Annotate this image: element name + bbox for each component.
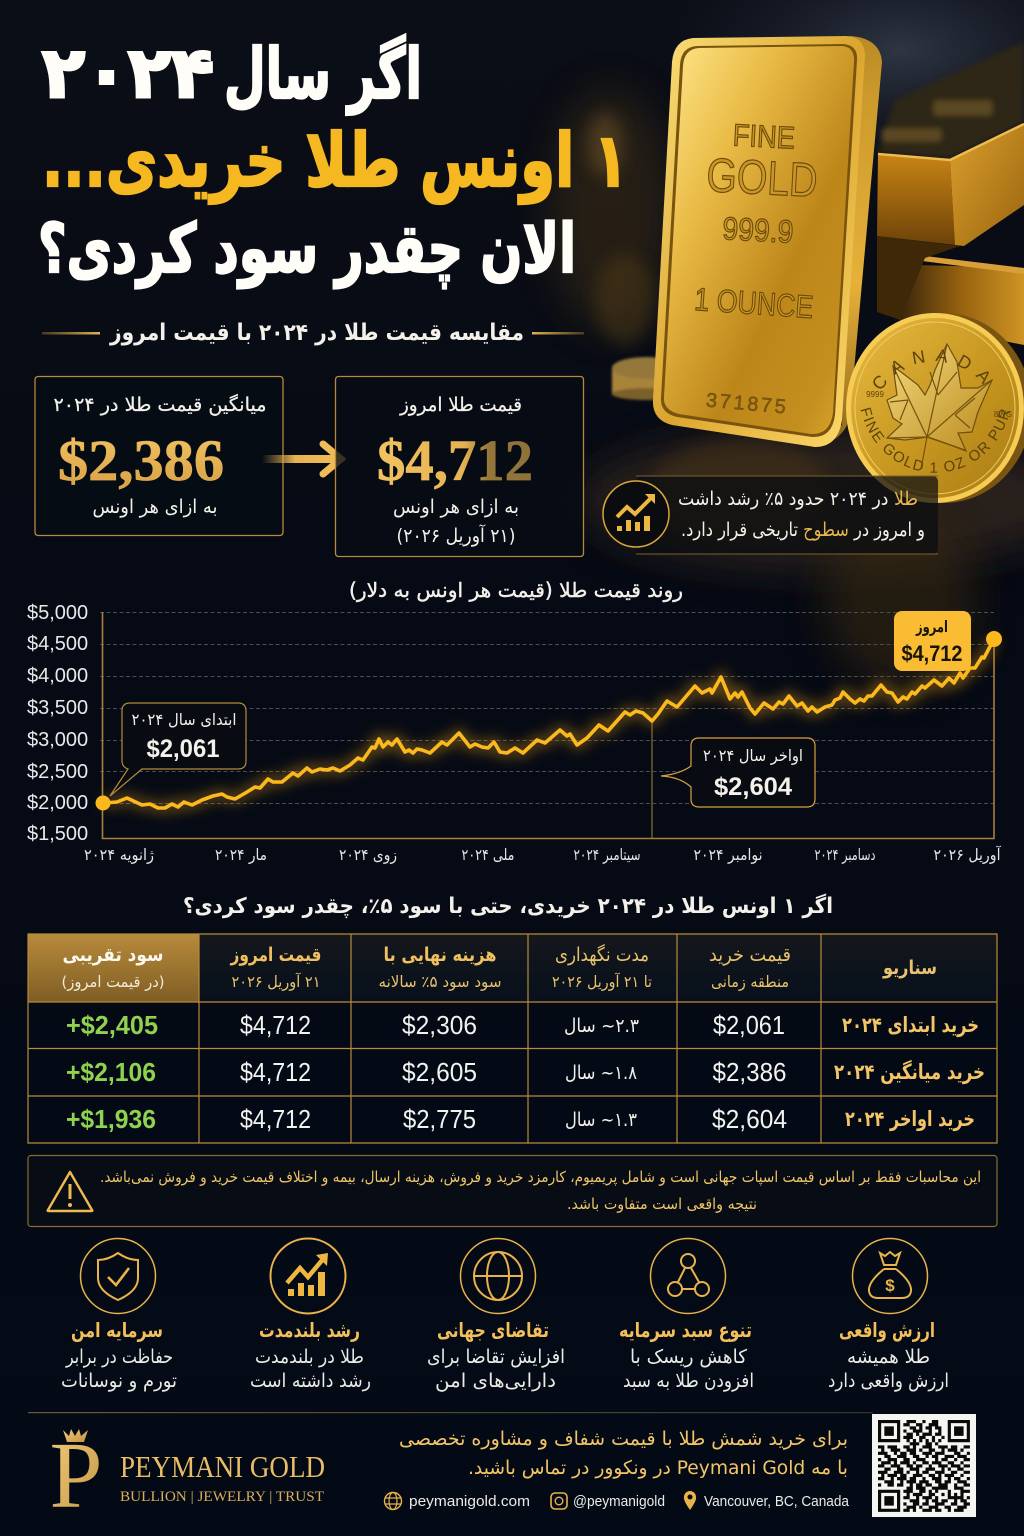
row: average 2024: $2,386	[712, 1057, 786, 1087]
callout: today	[894, 611, 971, 671]
row: late 2024: +$1,936	[66, 1104, 156, 1134]
row: late 2024: خرید اواخر ۲۰۲۴	[845, 1107, 975, 1131]
bar engraving: FINE	[732, 117, 796, 156]
hero photo: gold bars and coin	[542, 0, 1024, 714]
table heading: اگر ۱ اونس طلا در ۲۰۲۴ خریدی، حتی با سود ۵٪، چقدر سود کردی؟	[183, 893, 833, 919]
table grid	[28, 934, 997, 1143]
x axis labels	[84, 845, 1001, 865]
row: average 2024	[66, 1057, 985, 1087]
row: late 2024: $4,712	[240, 1104, 311, 1134]
contact row: @peymanigold	[573, 1493, 665, 1510]
gold maple coin: FINE GOLD 1 OZ OR PUR	[860, 408, 1010, 473]
feature: long-term growth: طلا در بلندمدت	[255, 1346, 364, 1368]
bar engraving: 371875	[705, 390, 787, 418]
main gold bar	[653, 36, 882, 447]
arrow	[262, 444, 341, 474]
x axis labels: ملی ۲۰۲۴	[461, 846, 514, 864]
call to action text: برای خرید شمش طلا با قیمت شفاف و مشاوره تخصصی	[399, 1428, 848, 1450]
feature: real value	[828, 1238, 949, 1392]
panel: disclaimer	[28, 1156, 997, 1226]
logo: Peymani Gold: BULLION | JEWELRY | TRUST	[120, 1489, 324, 1505]
table header row	[28, 934, 997, 1002]
price line glow	[103, 639, 994, 808]
gold maple coin	[846, 313, 1024, 503]
callout: end of 2024: $2,604	[714, 773, 792, 801]
callout: today: $4,712	[902, 641, 962, 666]
feature: global demand: تقاضای جهانی	[437, 1318, 549, 1342]
icon: web	[384, 1492, 402, 1510]
bar engraving: GOLD	[705, 149, 819, 208]
background haze	[550, 0, 1024, 685]
logo: Peymani Gold	[50, 1424, 325, 1528]
row: average 2024: خرید میانگین ۲۰۲۴	[834, 1059, 985, 1084]
header labels: سود تقریبی	[62, 944, 164, 966]
callout: start of 2024	[110, 703, 246, 796]
bar engraving: 999.9	[722, 210, 794, 250]
blurred coins stack	[612, 357, 680, 400]
x axis labels: دسامبر ۲۰۲۴	[814, 846, 876, 864]
panel: average 2024 price: میانگین قیمت طلا در ۲۰۲۴	[53, 393, 266, 416]
panel: today's price: (۲۱ آوریل ۲۰۲۶)	[396, 523, 516, 547]
y axis labels: $4,000	[27, 665, 88, 687]
icon: globe	[460, 1238, 536, 1314]
icon: money bag	[852, 1238, 928, 1314]
contact row	[384, 1491, 850, 1510]
callout: gold growth note: و امروز در سطوح تاریخی قرار دارد.	[681, 519, 925, 541]
feature: diversification: کاهش ریسک با	[630, 1346, 748, 1368]
call to action text	[399, 1428, 848, 1479]
header labels	[62, 943, 937, 992]
QR code	[872, 1414, 976, 1517]
y axis labels: $4,500	[27, 633, 88, 655]
icon: instagram	[551, 1493, 567, 1509]
table: scenarios	[28, 934, 997, 1143]
feature: real value: ارزش واقعی دارد	[828, 1370, 949, 1392]
row: early 2024: $2,061	[713, 1010, 785, 1040]
y axis labels	[27, 602, 88, 845]
icon: shield	[80, 1238, 156, 1314]
row: early 2024: ۲.۳~ سال	[564, 1015, 639, 1037]
feature: diversification	[619, 1238, 754, 1392]
panel: average 2024 price	[35, 376, 283, 536]
row: average 2024: $4,712	[240, 1057, 311, 1087]
icon: growth chart	[603, 481, 669, 547]
feature: diversification: تنوع سبد سرمایه	[619, 1318, 752, 1342]
header labels: سود سود ۵٪ سالانه	[378, 973, 502, 991]
feature: long-term growth: رشد داشته است	[250, 1370, 371, 1392]
x axis labels: ژانویه ۲۰۲۴	[84, 846, 154, 864]
feature: safe investment: تورم و نوسانات	[61, 1370, 177, 1392]
feature: safe investment: حفاظت در برابر	[65, 1346, 173, 1368]
row: average 2024: +$2,106	[66, 1057, 156, 1087]
x axis labels: نوامبر ۲۰۲۴	[694, 846, 762, 864]
row: late 2024: $2,604	[712, 1104, 787, 1134]
row: late 2024: $2,775	[403, 1104, 476, 1134]
gold maple coin: CANADA	[873, 349, 989, 388]
feature: global demand	[427, 1238, 565, 1392]
panel: today's price: $4,712	[377, 428, 533, 493]
callout: gold growth note: طلا در ۲۰۲۴ حدود ۵٪ رشد داشت	[678, 488, 918, 510]
back gold bars	[877, 42, 1024, 345]
header labels: تا ۲۱ آوریل ۲۰۲۶	[552, 972, 652, 992]
icon: crown	[63, 1429, 88, 1442]
callout: start of 2024: ابتدای سال ۲۰۲۴	[132, 710, 236, 729]
y axis labels: $1,500	[27, 823, 88, 845]
logo: Peymani Gold: P	[50, 1424, 102, 1528]
feature: safe investment	[61, 1238, 177, 1392]
row: late 2024: ۱.۳~ سال	[565, 1109, 637, 1131]
feature: real value: ارزش واقعی	[839, 1318, 935, 1342]
feature: long-term growth	[250, 1238, 371, 1392]
panel: average 2024 price: به ازای هر اونس	[92, 496, 218, 518]
bar engraving	[693, 117, 819, 418]
row: late 2024	[66, 1104, 975, 1134]
title: ۲۰۲۴	[42, 32, 214, 114]
callout: start of 2024: $2,061	[146, 735, 220, 763]
header labels: قیمت خرید	[709, 944, 791, 966]
callout: today: امروز	[915, 617, 948, 636]
panel: average 2024 price: $2,386	[58, 428, 224, 493]
y axis labels: $5,000	[27, 602, 88, 624]
price line	[103, 639, 994, 808]
y axis labels: $2,000	[27, 792, 88, 814]
panel: today's price	[336, 376, 584, 556]
start and end dots	[96, 631, 1002, 810]
call to action text: با مه Peymani Gold در ونکوور در تماس باشید.	[468, 1457, 848, 1479]
subtitle: مقایسه قیمت طلا در ۲۰۲۴ با قیمت امروز	[109, 320, 524, 346]
x axis labels: زوی ۲۰۲۴	[339, 846, 397, 865]
row: early 2024: $4,712	[240, 1010, 311, 1040]
title: اگر سال	[224, 33, 422, 115]
panel: today's price: قیمت طلا امروز	[399, 394, 522, 416]
feature: global demand: دارایی‌های امن	[435, 1370, 556, 1392]
contact row: Vancouver, BC, Canada	[704, 1493, 850, 1510]
header labels: (در قیمت امروز)	[62, 973, 164, 992]
bar engraving: 1 OUNCE	[693, 281, 815, 325]
row: average 2024: $2,605	[402, 1057, 477, 1087]
panel: disclaimer: نتیجه واقعی است متفاوت باشد.	[567, 1195, 757, 1213]
chart heading: روند قیمت طلا (قیمت هر اونس به دلار)	[349, 578, 683, 602]
header labels: هزینه نهایی با	[384, 944, 496, 966]
row: early 2024	[66, 1010, 979, 1040]
feature: long-term growth: رشد بلندمدت	[259, 1318, 360, 1342]
y axis labels: $3,000	[27, 729, 88, 751]
line chart: gold price trend	[27, 602, 1002, 865]
row: average 2024: ۱.۸~ سال	[565, 1062, 637, 1084]
panel: today's price: به ازای هر اونس	[393, 496, 519, 518]
header labels: ۲۱ آوریل ۲۰۲۶	[232, 972, 320, 992]
feature: safe investment: سرمایه امن	[71, 1318, 163, 1342]
row: early 2024: خرید ابتدای ۲۰۲۴	[842, 1013, 979, 1037]
icon: growth chart	[270, 1238, 346, 1314]
icon: money bag: $	[885, 1276, 895, 1295]
gold maple coin: 8WG	[994, 410, 1012, 419]
row: early 2024: $2,306	[402, 1010, 477, 1040]
icon: network	[650, 1238, 726, 1314]
title: الان چقدر سود کردی؟	[38, 210, 576, 289]
x axis labels: آوریل ۲۰۲۶	[934, 845, 1001, 865]
feature: real value: طلا همیشه	[847, 1346, 930, 1368]
row: early 2024: +$2,405	[66, 1010, 158, 1040]
contact row: peymanigold.com	[409, 1493, 530, 1510]
x axis labels: مار ۲۰۲۴	[215, 846, 267, 864]
gold maple coin: 9999	[866, 390, 884, 399]
callout: gold growth note	[603, 476, 938, 554]
logo: Peymani Gold: PEYMANI GOLD	[120, 1449, 325, 1484]
icon: location pin	[684, 1491, 696, 1510]
header labels: منطقه زمانی	[711, 973, 789, 991]
title: ۱ اونس طلا خریدی...	[42, 118, 628, 205]
callout: end of 2024: اواخر سال ۲۰۲۴	[703, 746, 803, 766]
y axis labels: $3,500	[27, 697, 88, 719]
header labels: مدت نگهداری	[555, 943, 649, 966]
feature: diversification: افزودن طلا به سبد	[623, 1370, 754, 1392]
x axis labels: سیتامبر ۲۰۲۴	[574, 846, 640, 864]
footer divider	[28, 1412, 873, 1413]
feature: global demand: افزایش تقاضا برای	[427, 1346, 565, 1368]
callout: end of 2024	[661, 738, 815, 807]
y axis labels: $2,500	[27, 761, 88, 783]
title	[38, 32, 628, 289]
icon: warning triangle	[48, 1172, 92, 1211]
header labels: قیمت امروز	[230, 944, 322, 966]
header labels: سناریو	[882, 957, 937, 979]
